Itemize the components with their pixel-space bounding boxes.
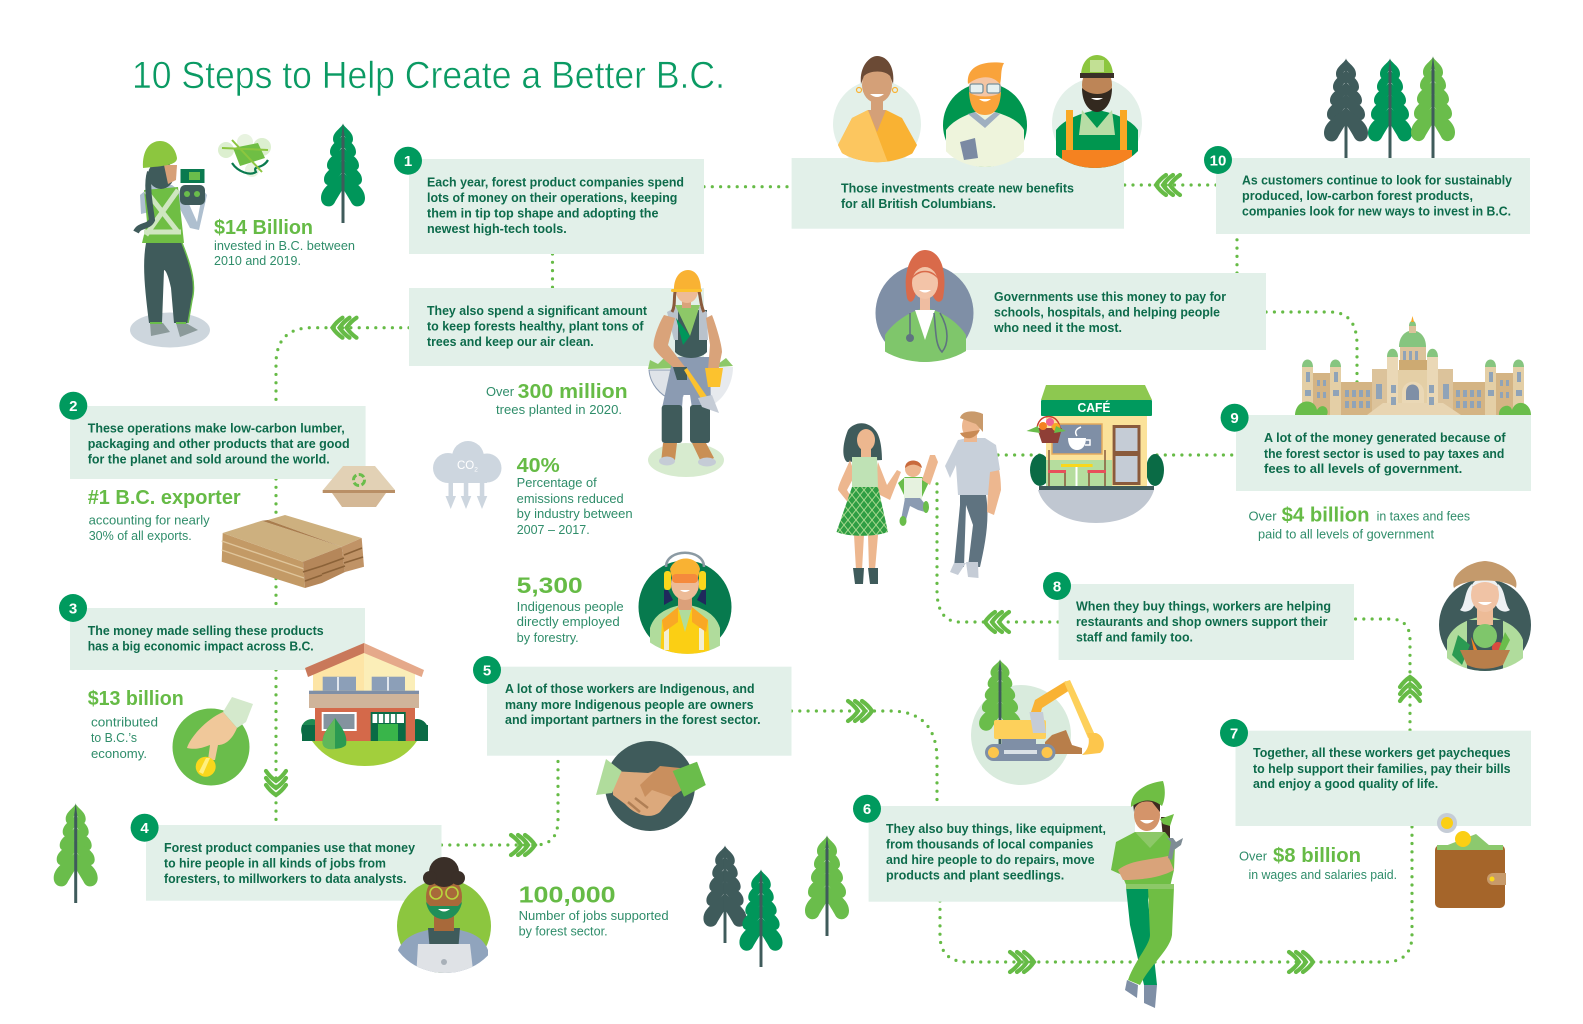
arrow: step 6 to 7 right xyxy=(1289,952,1313,972)
panel: governments: who need it the most. xyxy=(993,321,1122,335)
arrow: step 4 to 5 xyxy=(511,835,535,855)
illustration: legislature building xyxy=(1295,316,1531,415)
panel: step 7: and enjoy a good quality of life. xyxy=(1253,777,1438,791)
stat: 14 billion: invested in B.C. between xyxy=(214,239,355,253)
illustration: cafe: CAFÉ xyxy=(1078,400,1110,415)
panel: step 2: 2 xyxy=(69,398,77,415)
arrow: step 5 to 6 xyxy=(848,701,872,721)
panel: step 5 xyxy=(473,656,792,756)
panel: step 4: foresters, to millworkers to data analysts. xyxy=(164,872,406,886)
stat: Indigenous people: Indigenous people xyxy=(517,600,624,614)
illustration: nurse portrait xyxy=(876,250,974,365)
stat: Indigenous people: directly employed xyxy=(517,615,620,629)
icon: CO2 cloud xyxy=(433,441,502,509)
illustration: woman in yellow portrait xyxy=(833,56,921,170)
arrow: step 1 to 2 xyxy=(332,318,356,338)
stat: jobs xyxy=(519,882,669,939)
icon: tree bottom left xyxy=(54,803,98,903)
panel: step 8: restaurants and shop owners support their xyxy=(1076,615,1327,629)
arrow: step 6 to 7 left xyxy=(1010,952,1034,972)
stat: 14 billion xyxy=(214,217,355,268)
stat: emissions: 40% xyxy=(517,455,560,477)
stat: trees planted: trees planted in 2020. xyxy=(496,403,622,417)
stat: exporter: 30% of all exports. xyxy=(89,529,192,543)
panel: step 4: Forest product companies use that money xyxy=(164,841,415,855)
illustration: cafe xyxy=(1026,385,1164,523)
stat: wages: Over xyxy=(1239,850,1267,864)
illustration: drone xyxy=(218,134,271,177)
panel: step 10: 10 xyxy=(1210,152,1226,170)
panel: step 2: packaging and other products that are good xyxy=(88,437,350,451)
panel: benefits: Those investments create new benefits xyxy=(841,182,1074,196)
panel: forest spending: trees and keep our air clean. xyxy=(427,335,594,349)
stat: trees planted xyxy=(486,381,628,417)
illustration: family xyxy=(836,411,1001,584)
stat: emissions: emissions reduced xyxy=(517,492,624,506)
panel: step 1: Each year, forest product companies spend xyxy=(427,176,684,190)
panel: step 5: and important partners in the forest sector. xyxy=(505,713,761,727)
panel: governments xyxy=(950,273,1266,350)
icon: tree trio top right xyxy=(1324,56,1455,158)
panel: step 1 xyxy=(394,147,704,254)
panel: step 9: A lot of the money generated because of xyxy=(1264,431,1506,445)
panel: step 6: 6 xyxy=(863,801,871,818)
arrow: step 8 to 9 xyxy=(985,612,1009,632)
panel: step 6 xyxy=(853,795,1135,902)
stat: exporter: accounting for nearly xyxy=(89,514,210,528)
title: 10 Steps to Help Create a Better B.C. xyxy=(132,55,725,97)
panel: step 1: them in tip top shape and adopting the xyxy=(427,207,658,221)
panel: step 8: 8 xyxy=(1053,578,1061,596)
stat: 13 billion: $13 billion xyxy=(88,688,184,710)
panel: step 2: for the planet and sold around the world. xyxy=(88,452,330,466)
panel: step 5: many more Indigenous people are owners xyxy=(505,698,754,712)
panel: step 7 xyxy=(1220,719,1531,826)
panel: step 10 xyxy=(1204,146,1530,234)
arrow: step 3 to 4 xyxy=(266,771,286,795)
panel: step 1: newest high-tech tools. xyxy=(427,222,567,236)
arrow: step 10 to benefits xyxy=(1156,175,1180,195)
panel: forest spending xyxy=(409,288,704,366)
stat: Indigenous people xyxy=(517,573,624,645)
icon: CO2 cloud: CO xyxy=(457,460,474,472)
illustration: Indigenous worker portrait xyxy=(638,553,732,660)
panel: benefits: for all British Columbians. xyxy=(841,197,996,211)
panel: step 3: 3 xyxy=(69,600,77,618)
stat: trees planted: Over xyxy=(486,385,514,399)
stat: exporter xyxy=(88,487,241,543)
panel: forest spending: to keep forests healthy, plant tons of xyxy=(427,320,644,334)
panel: step 10: As customers continue to look for sustainably xyxy=(1242,174,1512,188)
panel: step 9: fees to all levels of government. xyxy=(1264,462,1462,476)
panel: step 9: 9 xyxy=(1230,410,1239,427)
illustration: coin in hand xyxy=(172,697,253,786)
icon: CO2 cloud: 2 xyxy=(474,466,478,474)
illustration: grower portrait xyxy=(1439,561,1531,680)
panel: step 5: 5 xyxy=(483,662,491,680)
panel: step 4: to hire people in all kinds of jobs from xyxy=(164,857,386,871)
illustration: man with cap portrait xyxy=(1052,55,1142,170)
stat: Indigenous people: 5,300 xyxy=(517,573,583,598)
illustration: drone operator xyxy=(130,141,210,348)
panel: step 8: When they buy things, workers are helping xyxy=(1076,600,1331,614)
stat: taxes: in taxes and fees xyxy=(1377,510,1470,524)
panel: step 10: companies look for new ways to invest in B.C. xyxy=(1242,205,1511,219)
panel: step 3 xyxy=(59,594,365,670)
illustration: recyclable box xyxy=(323,466,395,507)
stat: emissions: Percentage of xyxy=(517,476,597,490)
illustration: excavator xyxy=(971,659,1104,785)
panel: step 1: lots of money on their operations, keeping xyxy=(427,191,677,205)
stat: trees planted: 300 million xyxy=(518,381,628,403)
icon: tree near step 1 xyxy=(321,123,365,223)
panel: step 2 xyxy=(59,392,366,479)
stat: wages: $8 billion xyxy=(1273,845,1361,867)
arrow: step 7 to 8 xyxy=(1400,677,1420,701)
stat: emissions: 2007 – 2017. xyxy=(517,523,590,537)
illustration: house xyxy=(301,643,428,766)
panel: step 6: from thousands of local companies xyxy=(886,838,1093,852)
panel: step 6: and hire people to do repairs, move xyxy=(886,853,1095,867)
stat: 14 billion: $14 Billion xyxy=(214,217,313,239)
stat: taxes: paid to all levels of government xyxy=(1258,528,1434,542)
panel: forest spending: They also spend a significant amount xyxy=(427,304,648,318)
illustration: man with phone portrait xyxy=(943,62,1027,168)
panel: step 10: produced, low-carbon forest products, xyxy=(1242,189,1473,203)
stat: taxes xyxy=(1248,505,1470,542)
illustration: wallet with coins xyxy=(1435,813,1506,908)
panel: step 7: 7 xyxy=(1230,726,1238,742)
panel: step 6: They also buy things, like equipment, xyxy=(886,822,1106,836)
panel: step 8 xyxy=(1043,572,1354,660)
dotted flow connectors xyxy=(276,185,1412,962)
stat: emissions: by industry between xyxy=(517,507,633,521)
panel: step 3: has a big economic impact across B.C. xyxy=(88,640,314,654)
stat: wages: in wages and salaries paid. xyxy=(1248,868,1397,882)
stat: 13 billion xyxy=(88,688,184,761)
stat: 13 billion: contributed xyxy=(91,716,158,730)
panel: governments: Governments use this money to pay for xyxy=(994,290,1226,304)
illustration: tree planter xyxy=(648,270,733,477)
panel: step 9 xyxy=(1221,404,1531,491)
illustration: handshake xyxy=(596,741,706,831)
illustration: worker with wrench xyxy=(1111,781,1183,1008)
illustration: lumber stack xyxy=(222,515,364,588)
stat: jobs: by forest sector. xyxy=(519,925,608,939)
panel: step 7: to help support their families, pay their bills xyxy=(1253,762,1511,776)
icon: tree group bottom centre xyxy=(703,835,849,967)
stat: 14 billion: 2010 and 2019. xyxy=(214,254,301,268)
stat: wages xyxy=(1239,845,1397,882)
panel: step 4 xyxy=(131,814,442,901)
stat: taxes: Over xyxy=(1248,510,1276,524)
stat: 13 billion: economy. xyxy=(91,747,147,761)
panel: step 7: Together, all these workers get paycheques xyxy=(1253,746,1511,760)
panel: step 8: staff and family too. xyxy=(1076,631,1193,645)
stat: emissions xyxy=(517,455,633,537)
stat: Indigenous people: by forestry. xyxy=(517,631,579,645)
panel: step 5: A lot of those workers are Indigenous, and xyxy=(505,682,754,696)
panel: step 4: 4 xyxy=(140,820,149,837)
panel: benefits xyxy=(792,158,1124,229)
stat: exporter: #1 B.C. exporter xyxy=(88,487,241,509)
panel: step 9: the forest sector is used to pay taxes and xyxy=(1264,447,1504,461)
stat: taxes: $4 billion xyxy=(1282,505,1370,527)
stat: 13 billion: to B.C.’s xyxy=(91,731,137,745)
panel: step 6: products and plant seedlings. xyxy=(886,869,1064,883)
stat: jobs: Number of jobs supported xyxy=(519,909,669,923)
panel: step 1: 1 xyxy=(404,153,412,170)
illustration: data analyst portrait xyxy=(397,857,491,980)
stat: jobs: 100,000 xyxy=(519,882,616,908)
panel: governments: schools, hospitals, and helping people xyxy=(994,306,1220,320)
panel: step 2: These operations make low-carbon lumber, xyxy=(88,422,345,436)
panel: step 3: The money made selling these products xyxy=(88,624,324,638)
